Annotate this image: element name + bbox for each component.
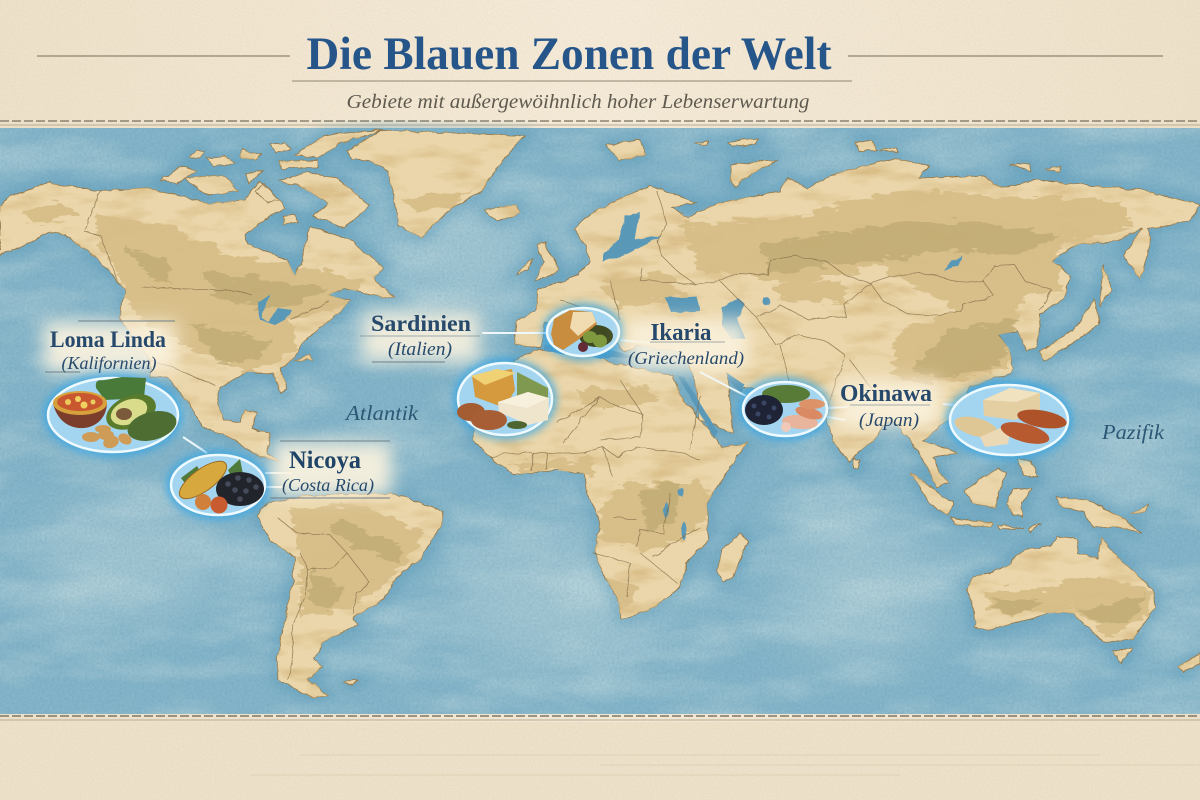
label: Ikaria: Ikaria [650, 320, 712, 346]
plate: corn, black beans [166, 450, 270, 520]
connector lines [183, 333, 966, 487]
callout: Nicoya [166, 441, 392, 520]
label: Loma Linda: Loma Linda [50, 327, 166, 352]
label: Nicoya [270, 441, 392, 498]
callout: Loma Linda [43, 321, 183, 457]
label: Okinawa: (Japan) [859, 410, 919, 431]
subtitle: Gebiete mit außergewöihnlich hoher Lebenserwartung [346, 91, 810, 113]
ocean label: Pazifik: Pazifik [1101, 420, 1165, 444]
callout: Okinawa [836, 380, 1073, 460]
plate: beans, avocado, nuts [43, 373, 183, 457]
country borders [84, 191, 1052, 680]
ocean label: Atlantik: Atlantik [344, 401, 419, 425]
land relief shading [20, 190, 1150, 638]
label: Sardinien [360, 311, 480, 362]
plate: bread, olives [542, 303, 624, 361]
inland seas [258, 212, 962, 540]
label: Okinawa [836, 380, 940, 431]
ocean [0, 128, 1200, 714]
bottom paper band [0, 722, 1200, 800]
label: Nicoya: Nicoya [289, 447, 361, 474]
world map [0, 128, 1200, 714]
label: Sardinien: (Italien) [388, 339, 452, 360]
coastal water halo [0, 130, 1200, 698]
callout: Ikaria [626, 320, 832, 441]
continents [0, 130, 1200, 698]
plate: berries, greens, fish [738, 377, 832, 441]
label: Ikaria: (Griechenland) [628, 348, 744, 369]
plate: tofu, sweet potatoes [945, 380, 1073, 460]
title: Die Blauen Zonen der Welt [306, 28, 832, 80]
label: Loma Linda: (Kalifornien) [62, 353, 156, 374]
callout: Sardinien [360, 303, 624, 440]
label: Okinawa: Okinawa [840, 381, 932, 407]
plate: cheese, tofu, cookies [453, 358, 557, 440]
label: Sardinien: Sardinien [371, 311, 471, 336]
label: Ikaria [626, 320, 748, 372]
label: Loma Linda [44, 321, 176, 374]
label: Nicoya: (Costa Rica) [282, 475, 374, 496]
